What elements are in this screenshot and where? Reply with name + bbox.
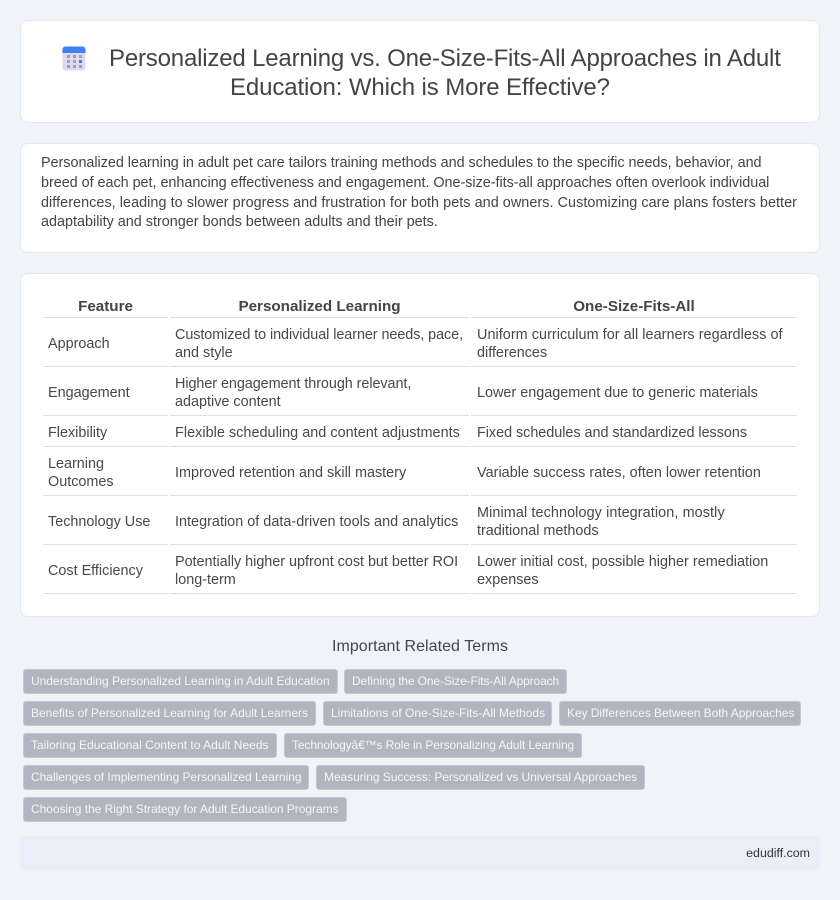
- title: Personalized Learning vs. One-Size-Fits-All Approaches in Adult: [109, 45, 781, 72]
- row: technology use: traditional methods: [477, 523, 599, 539]
- row: technology use: Integration of data-driven tools and analytics: [175, 514, 458, 530]
- row: learning outcomes: Learning: [48, 456, 104, 472]
- row: technology use: Minimal technology integration, mostly: [477, 505, 725, 521]
- row: cost efficiency: [48, 554, 768, 588]
- related terms tags: [23, 669, 801, 822]
- table header: Feature: [78, 298, 133, 315]
- row: learning outcomes: Variable success rates, often lower retention: [477, 465, 761, 481]
- row: cost efficiency: long-term: [175, 572, 236, 588]
- row: cost efficiency: Cost Efficiency: [48, 563, 143, 579]
- footer: edudiff.com: [746, 846, 810, 860]
- intro text: Personalized learning in adult pet care tailors training methods and schedules to the specific needs, behavior, and: [41, 155, 762, 171]
- row: learning outcomes: Outcomes: [48, 474, 114, 490]
- row: learning outcomes: [48, 456, 761, 490]
- intro text: [41, 155, 797, 230]
- row: approach: Customized to individual learner needs, pace,: [175, 327, 463, 343]
- related terms tags: Choosing the Right Strategy for Adult Education Programs: [31, 802, 339, 816]
- footer: [20, 836, 820, 870]
- title: [109, 45, 781, 101]
- related terms tags: Tailoring Educational Content to Adult Needs: [31, 738, 268, 752]
- row: approach: [48, 327, 783, 361]
- row: approach: differences: [477, 345, 547, 361]
- row: engagement: Lower engagement due to generic materials: [477, 385, 758, 401]
- row: cost efficiency: Lower initial cost, possible higher remediation: [477, 554, 768, 570]
- row: approach: Approach: [48, 336, 110, 352]
- related terms tags: Defining the One-Size-Fits-All Approach: [352, 674, 559, 688]
- row: flexibility: Fixed schedules and standardized lessons: [477, 425, 747, 441]
- row: cost efficiency: expenses: [477, 572, 539, 588]
- related terms tags: Key Differences Between Both Approaches: [567, 706, 794, 720]
- related terms tags: Challenges of Implementing Personalized Learning: [31, 770, 302, 784]
- row: flexibility: [48, 425, 747, 441]
- intro text: differences, leading to slower progress and frustration for both pets and owners. Customizing care plans fosters better: [41, 195, 797, 211]
- title card: [20, 20, 820, 123]
- title: Education: Which is More Effective?: [230, 74, 610, 101]
- row: approach: and style: [175, 345, 233, 361]
- intro text: breed of each pet, enhancing effectiveness and engagement. One-size-fits-all approaches often overlook individual: [41, 175, 769, 191]
- table header: Personalized Learning: [238, 298, 401, 315]
- row: flexibility: Flexibility: [48, 425, 107, 441]
- row: approach: Uniform curriculum for all learners regardless of: [477, 327, 783, 343]
- row: cost efficiency: Potentially higher upfront cost but better ROI: [175, 554, 458, 570]
- table header: [78, 298, 695, 315]
- row: engagement: adaptive content: [175, 394, 281, 410]
- icon: calendar: [62, 46, 86, 70]
- related terms tags: Limitations of One-Size-Fits-All Methods: [331, 706, 545, 720]
- comparison table panel: [20, 273, 820, 617]
- related terms tags: Understanding Personalized Learning in Adult Education: [31, 674, 330, 688]
- row: technology use: Technology Use: [48, 514, 150, 530]
- related terms heading: Important Related Terms: [332, 638, 508, 655]
- intro panel: [20, 143, 820, 253]
- table header: One-Size-Fits-All: [573, 298, 695, 315]
- row: technology use: [48, 505, 725, 539]
- row: flexibility: Flexible scheduling and content adjustments: [175, 425, 460, 441]
- row: engagement: Engagement: [48, 385, 130, 401]
- intro text: adaptability and stronger bonds between adults and their pets.: [41, 214, 438, 230]
- row: learning outcomes: Improved retention and skill mastery: [175, 465, 406, 481]
- related terms tags: Technologyâ€™s Role in Personalizing Adult Learning: [292, 738, 574, 752]
- related terms tags: Benefits of Personalized Learning for Adult Learners: [31, 706, 308, 720]
- related terms tags: Measuring Success: Personalized vs Universal Approaches: [324, 770, 637, 784]
- row: engagement: [48, 376, 758, 410]
- row: engagement: Higher engagement through relevant,: [175, 376, 411, 392]
